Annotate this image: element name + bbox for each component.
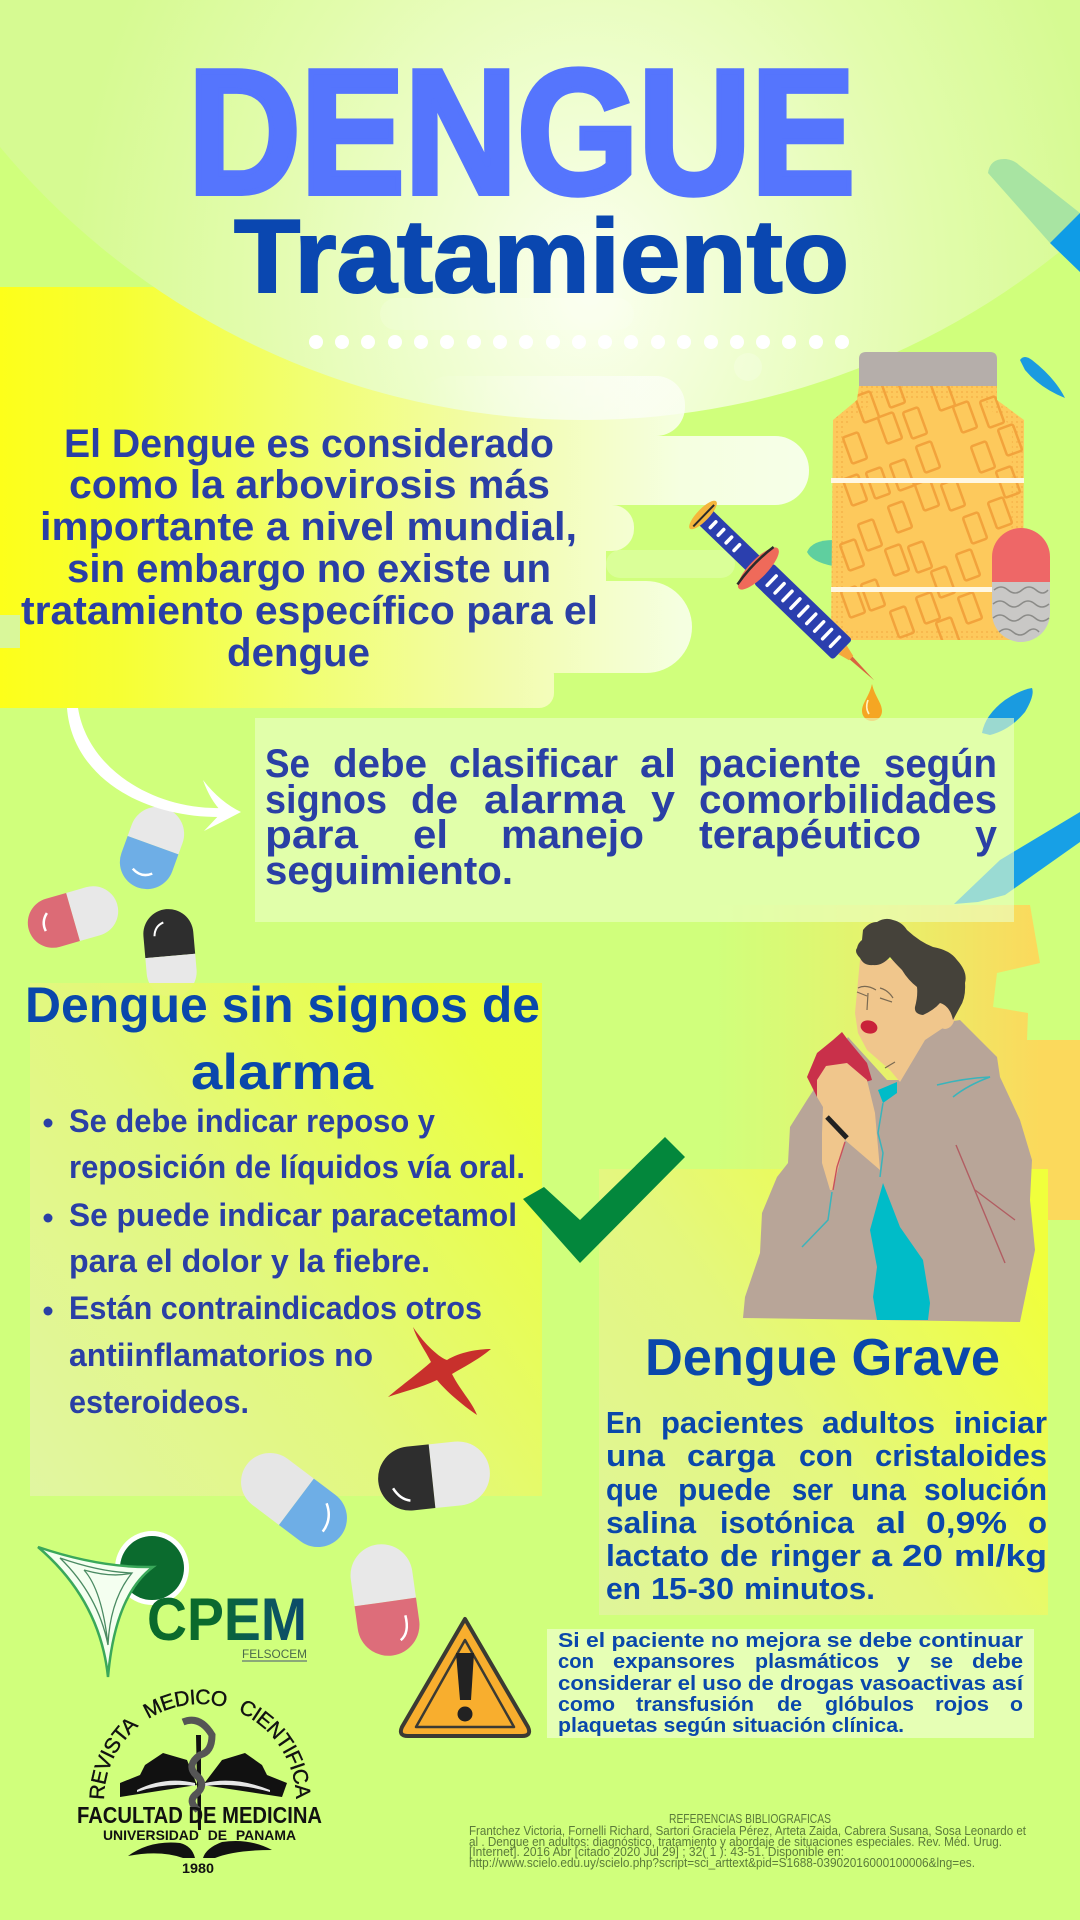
text block: grave treatment: 15-30 [651, 1571, 734, 1606]
text block: classification: comorbilidades [699, 778, 997, 822]
text block: grave treatment: puede [678, 1472, 771, 1507]
text block: classification: terapéutico [699, 813, 921, 857]
bullet list: reposición de líquidos vía oral. [69, 1149, 525, 1185]
faint cloud band [606, 550, 735, 578]
text block: classification: y [651, 778, 676, 822]
orange brush behind person [716, 905, 1080, 1220]
logo: Revista Medico Cientifica [77, 1689, 322, 1876]
text block: further treatment: plasmáticos [755, 1651, 879, 1673]
text block: grave treatment: 0,9% [926, 1505, 1007, 1540]
pill: red and grey lower [347, 1540, 423, 1660]
text block: classification: y [975, 813, 998, 857]
text block: grave treatment: al [876, 1505, 906, 1540]
icon: teal leaf behind jar [807, 540, 833, 566]
text block: classification: de [411, 778, 458, 822]
text block: further treatment: debe [972, 1651, 1023, 1673]
icon: blue brush band [954, 812, 1080, 904]
text block: grave treatment: una [606, 1438, 666, 1473]
text block: grave treatment [606, 1405, 1047, 1606]
text block: intro: como la arbovirosis más [69, 463, 550, 507]
arrow [67, 708, 241, 831]
text block: intro: dengue [227, 631, 370, 675]
text block: further treatment: se [930, 1651, 953, 1673]
pill: black and grey lower [375, 1438, 493, 1514]
circular title: REVISTA MEDICO CIENTIFICA [89, 1689, 310, 1800]
references: Frantchez Victoria, Fornelli Richard, Sartori Graciela Pérez, Arteta Zaida, Cabrera Susana, Sosa Leonardo et [469, 1824, 1026, 1838]
text block: grave treatment: iniciar [954, 1405, 1047, 1440]
subtitle: Tratamiento [234, 199, 849, 315]
icon: top right brush stroke [988, 159, 1080, 272]
references: al . Dengue en adultos: diagnóstico, tratamiento y abordaje de situaciones especiales. Rev. Méd. Urug. [469, 1835, 1002, 1849]
pill: blue and grey [112, 799, 192, 897]
CPEM wordmark: CPEM [147, 1586, 307, 1653]
text block: classification: alarma [484, 778, 626, 822]
text block: grave treatment: que [606, 1472, 658, 1507]
icon: blue leaf mid [982, 688, 1033, 735]
icon: green check mark [523, 1137, 685, 1263]
text block: grave treatment: con [799, 1438, 853, 1473]
text block: further treatment: expansores [613, 1651, 735, 1673]
bullet list [44, 1103, 525, 1420]
pill: red and grey [22, 880, 124, 954]
heading: sin signos: Dengue sin signos de [25, 977, 540, 1033]
text block: grave treatment: ml/kg [954, 1538, 1047, 1573]
text block: classification: al [640, 742, 676, 786]
text block: grave treatment: cristaloides [875, 1438, 1047, 1473]
icon: warning triangle [401, 1619, 529, 1736]
text block: further treatment: considerar el uso de drogas vasoactivas así [558, 1673, 1025, 1695]
panel: classification [255, 718, 1014, 922]
text block: grave treatment: a [871, 1538, 893, 1573]
text block: grave treatment: una [851, 1472, 907, 1507]
text block: grave treatment: solución [924, 1472, 1047, 1507]
bullet list: antiinflamatorios no [69, 1337, 373, 1373]
icon: red cross [388, 1327, 491, 1415]
text block: further treatment: rojos [935, 1694, 989, 1716]
text block: grave treatment: salina [606, 1505, 697, 1540]
university name: UNIVERSIDAD DE PANAMA [103, 1827, 296, 1843]
heading: dengue grave: Dengue Grave [645, 1329, 1000, 1387]
panel: dengue grave [599, 1169, 1048, 1615]
pill: blue and grey lower [229, 1441, 359, 1559]
icon: blue leaf top [1020, 357, 1065, 398]
text block: intro [21, 422, 598, 675]
text block: further treatment: glóbulos [825, 1694, 914, 1716]
bullet list: esteroideos. [69, 1384, 249, 1420]
text block: classification: Se [265, 742, 310, 786]
faculty name: FACULTAD DE MEDICINA [77, 1802, 322, 1828]
references: http://www.scielo.edu.uy/scielo.php?script=sci_arttext&pid=S1688-03902016000100006&lng=es. [469, 1856, 975, 1870]
text block: further treatment: con [558, 1651, 594, 1673]
pill: black and grey [141, 907, 199, 999]
text block: classification: según [884, 742, 997, 786]
logo: CPEM [38, 1531, 307, 1677]
text block: grave treatment: 20 [902, 1538, 943, 1573]
text block: intro: tratamiento específico para el [21, 589, 598, 633]
title: DENGUE [188, 33, 855, 231]
text block: grave treatment: de [720, 1538, 758, 1573]
references [469, 1812, 1026, 1870]
text block: grave treatment: ser [792, 1472, 833, 1507]
references: REFERENCIAS BIBLIOGRAFICAS [669, 1812, 831, 1826]
text block: further treatment: plaquetas según situación clínica. [558, 1715, 904, 1737]
text block: further treatment: como [558, 1694, 615, 1716]
open book [120, 1753, 287, 1797]
text block: classification: debe [333, 742, 427, 786]
bullet list: Se debe indicar reposo y [69, 1103, 435, 1139]
heading: sin signos [25, 977, 540, 1100]
text block: intro: importante a nivel mundial, [40, 505, 577, 549]
text block: grave treatment: lactato [606, 1538, 709, 1573]
icon: pill jar [831, 352, 1024, 649]
FELSOCEM wordmark: FELSOCEM [242, 1647, 307, 1661]
references: [Internet]. 2016 Abr [citado 2020 Jul 29] ; 32( 1 ): 43-51. Disponible en: [469, 1845, 844, 1859]
text block: classification: seguimiento. [265, 849, 513, 893]
text block: grave treatment: carga [687, 1438, 776, 1473]
illustration: sick person in blanket [743, 919, 1035, 1322]
text block: grave treatment: En [606, 1405, 642, 1440]
text block: grave treatment: adultos [822, 1405, 935, 1440]
text block: classification [265, 742, 998, 893]
text block: grave treatment: minutos. [744, 1571, 875, 1606]
icon: red capsule [992, 528, 1050, 642]
text block: grave treatment: pacientes [661, 1405, 804, 1440]
laurels [128, 1841, 272, 1858]
year: 1980 [182, 1860, 214, 1876]
bullet list: Están contraindicados otros [69, 1290, 482, 1326]
panel: yellow intro cloud [0, 287, 809, 708]
faint cloud bars [491, 353, 762, 420]
text block: grave treatment: o [1028, 1505, 1047, 1540]
text block: further treatment [558, 1630, 1025, 1737]
text block: classification: el [413, 813, 448, 857]
bullet list: para el dolor y la fiebre. [69, 1243, 430, 1279]
text block: further treatment: Si el paciente no mejora se debe continuar [558, 1630, 1023, 1652]
text block: classification: signos [265, 778, 387, 822]
text block: intro: sin embargo no existe un [67, 547, 551, 591]
panel: dengue sin signos de alarma [25, 977, 542, 1496]
text block: further treatment: o [1010, 1694, 1023, 1716]
text block: classification: clasificar [449, 742, 618, 786]
heading: sin signos: alarma [191, 1044, 374, 1100]
text block: further treatment: transfusión [636, 1694, 754, 1716]
text block: further treatment: y [897, 1651, 911, 1673]
text block: classification: para [265, 813, 359, 857]
icon: oil drop [862, 684, 882, 721]
text block: grave treatment: isotónica [720, 1505, 855, 1540]
text block: grave treatment: ringer [770, 1538, 861, 1573]
text block: classification: paciente [698, 742, 861, 786]
dotted divider [309, 335, 849, 349]
background light circle [0, 0, 1080, 420]
text block: grave treatment: en [606, 1571, 641, 1606]
panel: further treatment [547, 1629, 1034, 1738]
text block: further treatment: de [777, 1694, 802, 1716]
bullet list: Se puede indicar paracetamol [69, 1197, 517, 1233]
text block: intro: El Dengue es considerado [64, 422, 554, 466]
icon: syringe [679, 491, 894, 700]
text block: classification: manejo [501, 813, 644, 857]
